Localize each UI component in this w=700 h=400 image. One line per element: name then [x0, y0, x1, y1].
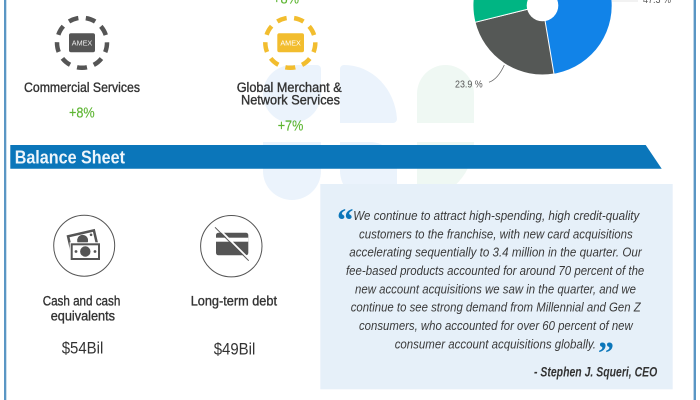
watermark shapes: [263, 65, 474, 200]
icon: closing quote mark: ”: [598, 334, 614, 370]
quote text: customers to the franchise, with new card acquisitions: [359, 226, 633, 241]
quote text: [346, 208, 644, 352]
growth value: merchant: +7%: [278, 118, 303, 135]
label: cash and cash equivalents: equivalents: [51, 308, 115, 323]
pie chart: [455, 0, 671, 91]
label: cash and cash equivalents: Cash and cash: [43, 293, 120, 308]
icon: opening quote mark: “: [337, 203, 354, 239]
quote text: consumers, who accounted for over 60 percent of new: [359, 318, 634, 333]
icon: cash: [54, 215, 115, 276]
quote author: - Stephen J. Squeri, CEO: [534, 364, 658, 379]
value: cash: $54Bil: [62, 339, 103, 357]
quote text: continue to see strong demand from Millennial and Gen Z: [351, 300, 642, 315]
icon: merchant card: AMEX: [280, 40, 301, 47]
section banner: balance sheet: [10, 145, 662, 169]
label: commercial services: Commercial Services: [24, 80, 140, 95]
slice label: 23.9: 23.9 %: [455, 79, 483, 91]
label: merchant and network services: Global Merchant &: [237, 80, 342, 95]
label: long-term debt: Long-term debt: [191, 293, 277, 308]
section banner: balance sheet: Balance Sheet: [15, 148, 125, 168]
icon: merchant card: [261, 13, 320, 72]
label: merchant and network services: Network Services: [241, 92, 340, 108]
label: merchant and network services: [237, 80, 342, 108]
icon: commercial services card: [53, 13, 111, 72]
icon: credit card crossed out: [201, 216, 262, 277]
quote text: new account acquisitions we saw in the quarter, and we: [355, 282, 636, 296]
quote text: consumer account acquisitions globally.: [395, 336, 596, 352]
label: cash and cash equivalents: [43, 293, 120, 323]
quote text: fee-based products accounted for around 70 percent of the: [346, 263, 644, 278]
quote text: We continue to attract high-spending, high credit-quality: [353, 208, 641, 223]
value: debt: $49Bil: [214, 341, 255, 359]
growth value: commercial: +8%: [69, 104, 95, 121]
panel: CEO quote: [320, 184, 673, 389]
icon: commercial services card: AMEX: [72, 40, 93, 47]
quote text: accelerating sequentially to 3.4 million in the quarter. Our: [349, 245, 642, 260]
